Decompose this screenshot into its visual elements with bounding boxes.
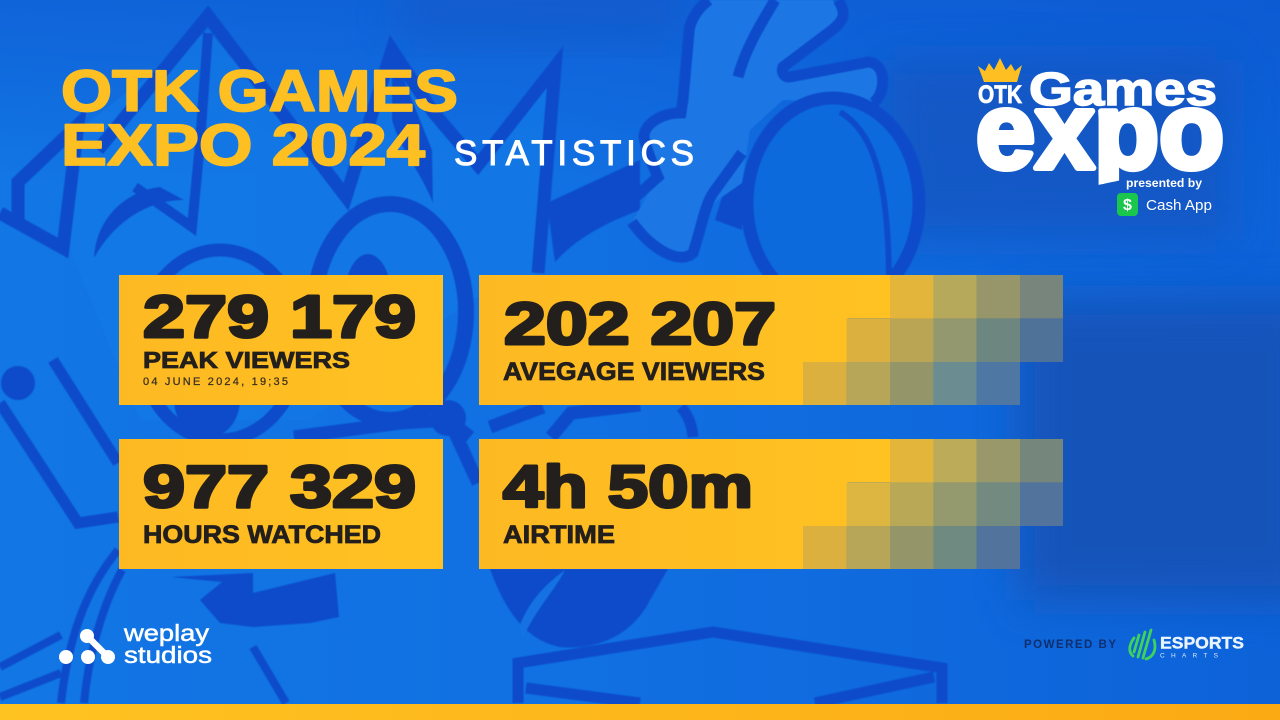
credit: powered by: POWERED BY [1024, 639, 1116, 651]
panel: hours watched [119, 439, 443, 569]
label: average viewers: AVEGAGE VIEWERS [503, 358, 765, 386]
label: airtime: AIRTIME [503, 521, 615, 549]
bottom bar [0, 704, 1280, 720]
icon: crown [978, 58, 1022, 82]
icon: cash app: $ [1123, 197, 1132, 214]
panel: average viewers [479, 275, 1063, 405]
logo: OTK Games Expo: Cash App [1146, 198, 1212, 214]
icon: cash app [1117, 193, 1138, 216]
logo: OTK Games Expo: presented by [1126, 178, 1203, 190]
logo: esports charts [1130, 630, 1244, 660]
value: average viewers: 202 207 [504, 291, 776, 357]
date of peak: 04 JUNE 2024, 19;35 [143, 376, 288, 388]
logo: weplay studios: weplay [123, 620, 210, 646]
logo: OTK Games Expo: expo [976, 70, 1224, 191]
logo: esports charts: CHARTS [1160, 652, 1219, 660]
logo: OTK Games Expo: Games [1029, 63, 1217, 115]
pixel fade: airtime [803, 439, 1063, 569]
pixel fade: average viewers [803, 275, 1063, 405]
subtitle: statistics: STATISTICS [454, 134, 694, 173]
logo: esports charts: ESPORTS [1160, 634, 1244, 652]
logo: OTK Games Expo: OTK [978, 81, 1022, 109]
label: hours watched: HOURS WATCHED [143, 521, 381, 549]
logo: weplay studios: studios [124, 642, 212, 668]
value: hours watched: 977 329 [143, 454, 416, 520]
logo: weplay studios [59, 620, 212, 668]
title: EXPO 2024 [61, 113, 425, 178]
panel: peak viewers [119, 275, 443, 405]
value: airtime: 4h 50m [503, 454, 753, 520]
title: OTK GAMES [61, 59, 458, 124]
title [61, 59, 458, 178]
panel: airtime [479, 439, 1063, 569]
label: peak viewers: PEAK VIEWERS [143, 347, 350, 373]
value: peak viewers: 279 179 [143, 284, 416, 350]
icon: esports charts leaf [1130, 630, 1155, 659]
